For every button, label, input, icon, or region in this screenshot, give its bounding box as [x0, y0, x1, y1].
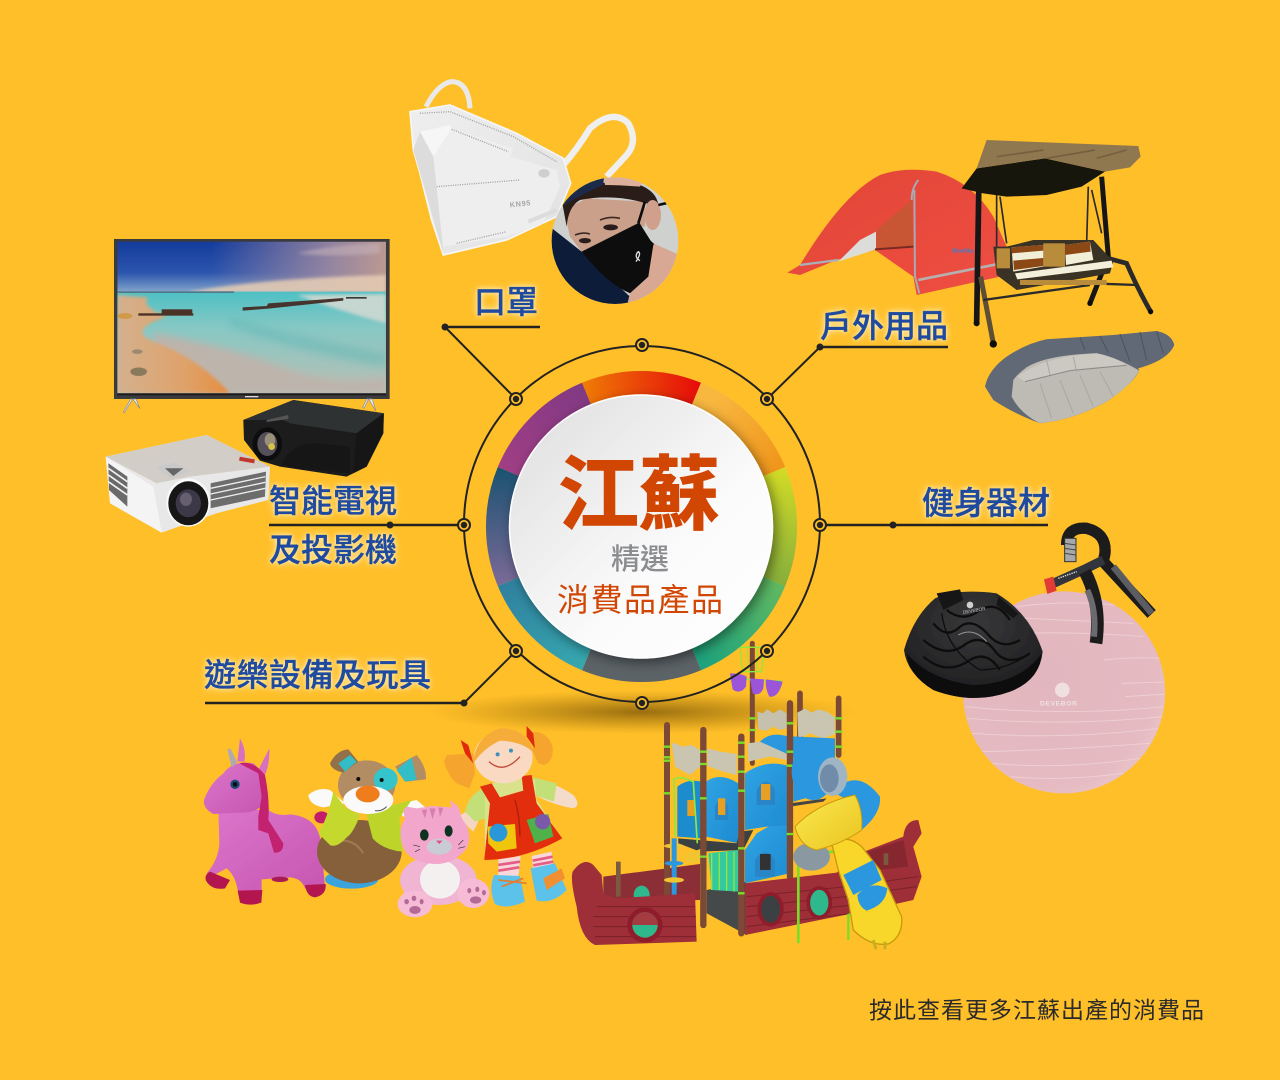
label: fitness equipment: 健身器材: [922, 485, 1050, 521]
illustration: plush pink cat: [398, 800, 489, 917]
illustration: balance dome: DEVEBOR: [963, 606, 987, 615]
diagram: ring and connector lines: [205, 324, 1048, 709]
label: smart TV and projectors: 智能電視: [269, 483, 397, 519]
illustration: exercise ball: [963, 591, 1167, 793]
illustration: pink unicorn hopper: [204, 738, 329, 905]
label: amusement equipment and toys: 遊樂設備及玩具: [204, 657, 432, 693]
footer link text: 按此查看更多江蘇出產的消費品: [869, 997, 1205, 1023]
illustration: rag doll: [444, 726, 577, 906]
illustration: black projector: [243, 400, 384, 477]
illustration: red tent: BlueSky: [953, 249, 974, 255]
illustration: woman wearing black mask: [550, 177, 683, 310]
illustration: exercise ball: DEVEBOR: [1040, 700, 1078, 707]
centre subtitle: selected: 精選: [611, 544, 669, 576]
label: outdoor goods: 戶外用品: [820, 308, 948, 344]
illustration: hand gripper: [1044, 528, 1152, 643]
centre subtitle: consumer products: 消費品產品: [557, 582, 725, 618]
illustration: sleeping bag: [985, 331, 1174, 423]
illustration: plush dog: [308, 749, 427, 889]
label: smart TV and projectors: [266, 480, 400, 568]
ground shadow under wheel: [427, 690, 857, 734]
illustration: playground ship: [572, 643, 922, 949]
illustration: balance dome: [904, 589, 1043, 698]
illustration: KN95 mask: [410, 82, 633, 255]
illustration: television: [114, 239, 390, 413]
label: masks: 口罩: [474, 284, 538, 320]
illustration: KN95 mask: KN95: [509, 198, 531, 209]
illustration: white projector: [106, 435, 270, 533]
white centre disc: [510, 395, 772, 658]
label: smart TV and projectors: 及投影機: [269, 532, 397, 568]
illustration: garden swing: [962, 140, 1153, 348]
illustration: red tent: [787, 170, 1007, 295]
colour wheel: [486, 371, 797, 682]
centre title: Jiangsu: 江蘇: [558, 451, 720, 541]
